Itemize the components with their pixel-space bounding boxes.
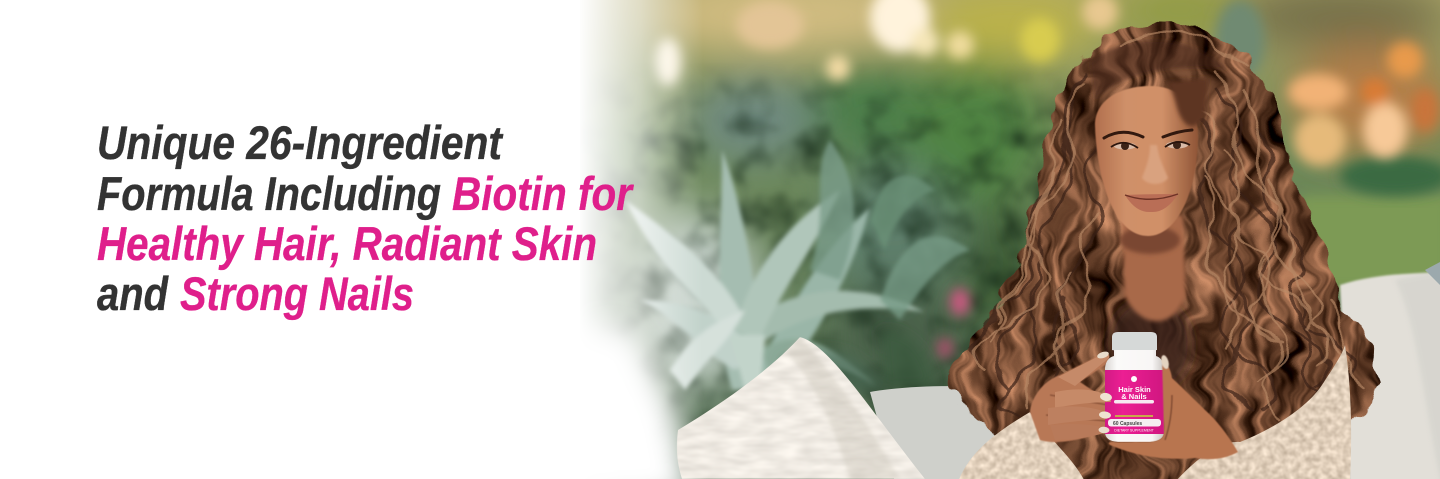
dietary note: DIETARY SUPPLEMENT — [1114, 428, 1155, 432]
neck — [1122, 215, 1186, 321]
dark plant under-layer — [780, 330, 935, 395]
crown shading — [1090, 40, 1228, 100]
right lawn and hedge — [1300, 195, 1440, 290]
lips — [1125, 194, 1178, 212]
right hand — [1109, 354, 1238, 459]
headline: Strong Nails — [180, 267, 414, 320]
sofa seat — [870, 386, 1000, 479]
agave plant — [625, 140, 970, 390]
sofa — [677, 262, 1440, 479]
label name: Hair Skin — [1118, 385, 1151, 394]
photo backdrop: blurred garden — [560, 0, 1440, 479]
label strip — [1114, 400, 1154, 404]
face — [1095, 86, 1198, 236]
hair back mass — [945, 22, 1377, 479]
headline: Formula Including — [97, 167, 441, 220]
wavy strands — [971, 32, 1365, 420]
headline: and — [97, 267, 169, 320]
bottle cap — [1112, 332, 1157, 352]
headline: Unique 26-Ingredient — [97, 116, 504, 169]
headline — [97, 116, 634, 320]
capsule count band — [1108, 419, 1161, 426]
hair curl over forehead — [1166, 78, 1208, 126]
chin shadow — [1120, 226, 1180, 254]
left arm and hand — [1030, 353, 1112, 442]
nose — [1142, 145, 1168, 184]
right sofa cushion — [1340, 272, 1440, 479]
throw pillow — [677, 337, 925, 479]
eyes — [1111, 141, 1190, 150]
white fade overlay — [0, 0, 703, 479]
label logo — [1131, 376, 1137, 382]
bottle body — [1105, 350, 1164, 442]
light strands — [972, 32, 1365, 420]
dark strands — [971, 70, 1351, 420]
pink label — [1105, 370, 1164, 434]
headline: Healthy Hair, Radiant Skin — [97, 217, 597, 270]
bottle — [1105, 332, 1164, 442]
label strip colours — [1115, 415, 1153, 417]
under-chin hair shadow — [1108, 297, 1192, 393]
bokeh highlights — [655, 0, 1439, 358]
fingers and nails on bottle — [1048, 350, 1113, 440]
eyebrows — [1104, 130, 1192, 138]
foliage masses — [640, 0, 1440, 400]
woman — [945, 22, 1377, 479]
bottle: 60 Capsules — [1113, 421, 1142, 427]
headline: Biotin for — [452, 167, 634, 220]
foliage texture — [605, 73, 1065, 479]
bottle: & Nails — [1121, 392, 1147, 401]
robe — [958, 345, 1351, 479]
